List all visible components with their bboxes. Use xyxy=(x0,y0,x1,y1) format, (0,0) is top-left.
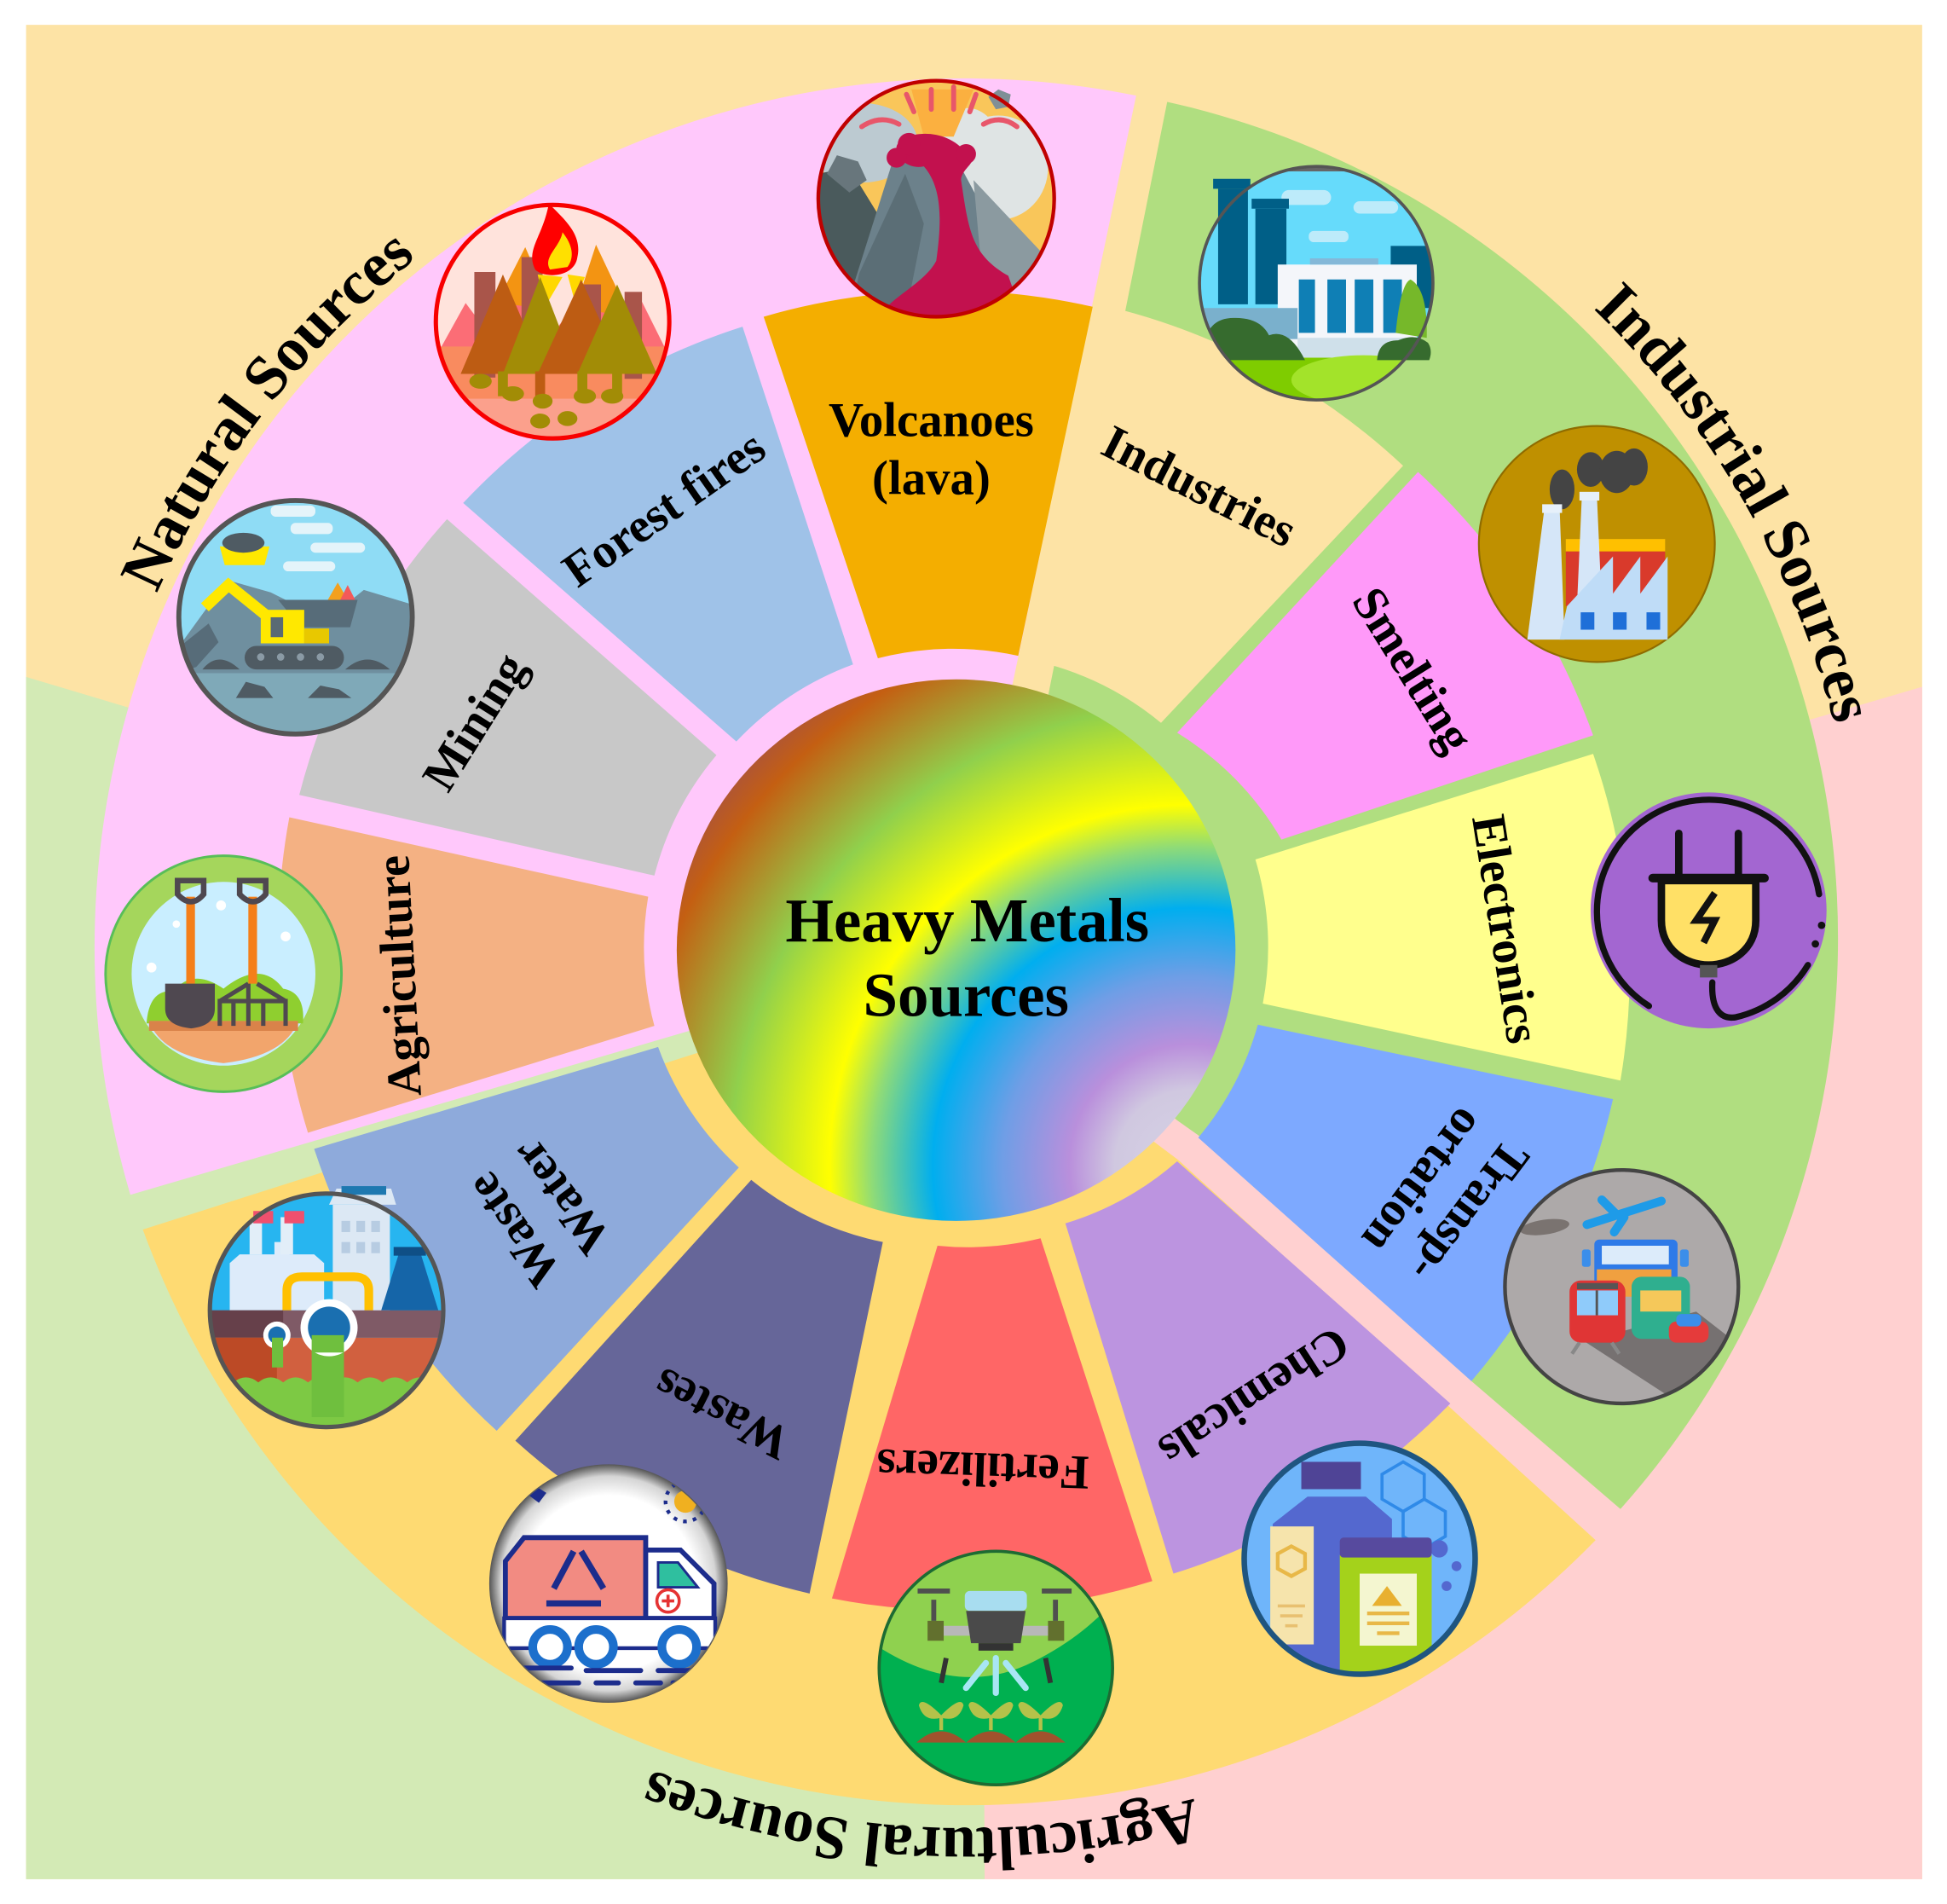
center circle: rainbow gradient xyxy=(677,680,1235,1221)
label: agriculture: Agriculture xyxy=(366,854,432,1097)
panel: natural sources sector xyxy=(95,78,1136,1195)
label: electronics: Electronics xyxy=(1461,811,1550,1047)
segment: fertilizers xyxy=(832,1238,1153,1611)
heading: natural sources: Natural Sources xyxy=(120,238,413,593)
label: fertilizers: Fertilizers xyxy=(875,1438,1090,1500)
segment: industries xyxy=(1049,310,1403,723)
segment: wastes xyxy=(516,1180,883,1594)
icon: electric plug xyxy=(1591,792,1827,1028)
segment: smelting xyxy=(1177,472,1593,840)
label: smelting: Smelting xyxy=(1342,578,1484,761)
icon: smelting factory xyxy=(1479,426,1715,662)
segment: mining xyxy=(299,519,716,876)
segment: waste water xyxy=(315,1047,739,1431)
center title xyxy=(785,886,1149,1030)
center title: Sources xyxy=(864,961,1069,1030)
icon: agriculture tools xyxy=(106,856,342,1091)
icon: drone spraying seedlings xyxy=(876,1550,1115,1787)
label: waste water: Waste xyxy=(455,1163,572,1297)
label: waste water: Water xyxy=(500,1129,621,1265)
label: volcanoes (lava): (lava) xyxy=(872,452,991,506)
label: mining: Mining xyxy=(412,644,537,800)
segment: forest fires xyxy=(463,327,853,742)
icon: transportation xyxy=(1504,1169,1741,1406)
label: chemicals: Chemicals xyxy=(1149,1316,1359,1478)
segment: agriculture xyxy=(278,817,655,1132)
icon: waste water pipe xyxy=(209,1186,457,1430)
label: industries: Industries xyxy=(1094,415,1305,558)
label: volcanoes (lava) xyxy=(829,393,1034,506)
label: transportation: ortation xyxy=(1351,1098,1495,1264)
panel: industrial sources sector xyxy=(993,101,1838,1509)
icon: recycling truck xyxy=(489,1464,728,1703)
label: transportation xyxy=(1351,1098,1540,1293)
center title: Heavy Metals xyxy=(785,886,1149,955)
segment: chemicals xyxy=(1066,1161,1450,1574)
label: waste water xyxy=(455,1129,621,1297)
icon: industrial plant xyxy=(1199,164,1436,408)
label: wastes: Wastes xyxy=(644,1357,799,1471)
segment: electronics xyxy=(1256,754,1630,1080)
label: volcanoes (lava): Volcanoes xyxy=(829,393,1034,447)
label: forest fires: Forest fires xyxy=(553,420,775,598)
heading: agricultural sources: Agricultural Sources xyxy=(644,1772,1194,1871)
icon: volcano xyxy=(806,81,1055,318)
heading: industrial sources: Industrial Sources xyxy=(1594,281,1862,721)
icon: forest fire xyxy=(435,204,671,441)
segment: volcanoes xyxy=(764,291,1093,658)
icon: chemical bottles xyxy=(1242,1441,1477,1678)
label: transportation: Transp- xyxy=(1399,1131,1540,1293)
segment: transportation xyxy=(1199,1025,1613,1381)
panel: agricultural sources sector xyxy=(143,963,1596,1805)
icon: mining excavator xyxy=(177,500,413,737)
